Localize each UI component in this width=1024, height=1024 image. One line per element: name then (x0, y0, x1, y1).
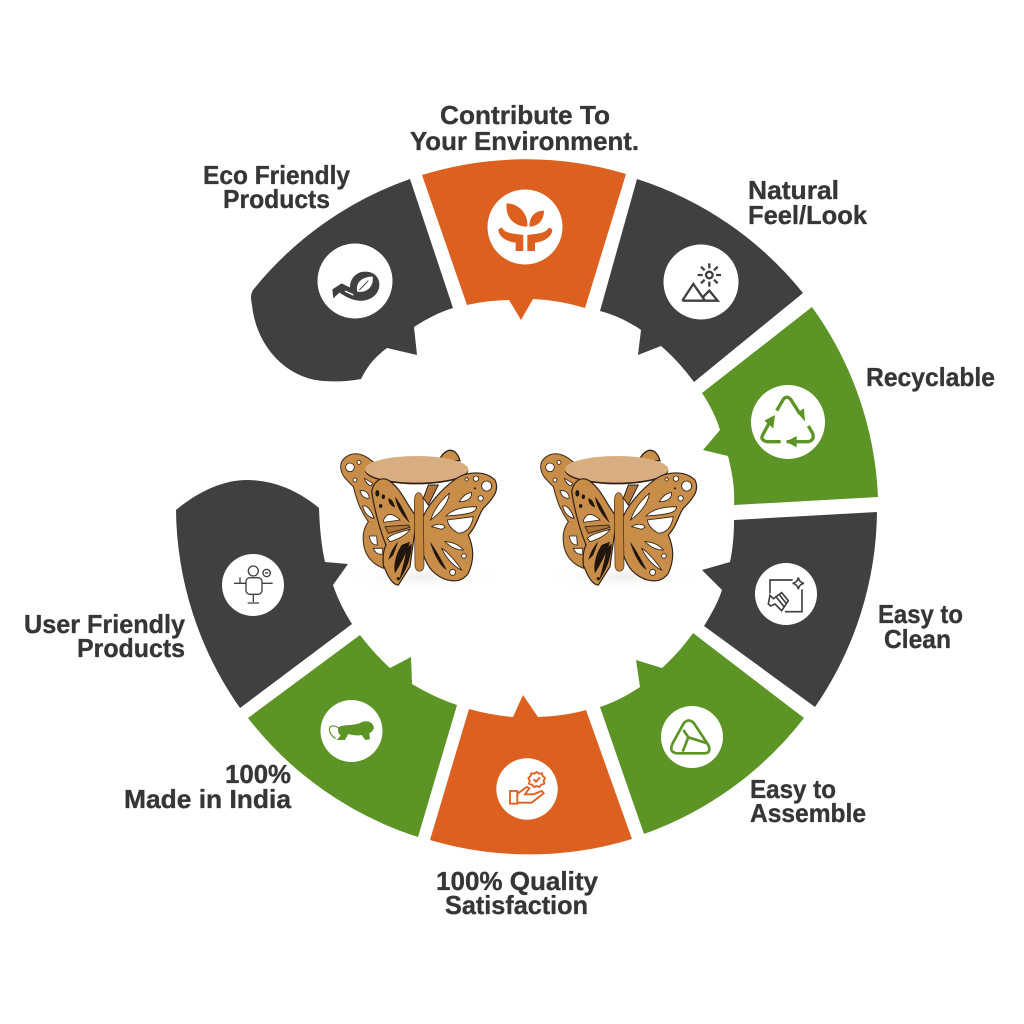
panel: easy to clean (702, 512, 877, 707)
label: 100% made in india: 100% (225, 759, 291, 789)
panel: user friendly products (176, 480, 352, 708)
label: eco friendly products: Products (223, 184, 330, 214)
icon: hands with plant (488, 190, 562, 264)
icon: person at desk (222, 554, 284, 616)
segment shape (702, 512, 877, 707)
label: 100% quality satisfaction: 100% Quality (436, 866, 599, 896)
label: recyclable: Recyclable (866, 362, 995, 392)
panel: easy to assemble (600, 633, 804, 834)
panel: natural feel and look (600, 179, 803, 382)
label: user friendly products: User Friendly (24, 609, 186, 639)
panel: quality satisfaction (430, 695, 632, 854)
label: user friendly products: Products (77, 633, 185, 663)
label: contribute to your environment: Contribute To (440, 100, 610, 130)
label: natural feel/look: Natural (748, 175, 839, 205)
icon: lion (320, 700, 382, 762)
segment shape (702, 307, 878, 505)
label: easy to clean: Easy to (878, 599, 963, 629)
icon: hand wiping surface (755, 563, 817, 625)
label: natural feel/look: Feel/Look (748, 200, 868, 230)
panel: contribute to environment (422, 159, 626, 320)
panel: recyclable (702, 307, 878, 505)
segment shape (430, 695, 632, 854)
label: 100% made in india (124, 759, 292, 814)
label: user friendly products (24, 609, 186, 663)
butterfly table, right (541, 450, 703, 592)
segment shape (248, 635, 457, 837)
segment shape (600, 633, 804, 834)
label: contribute to your environment: Your Environment. (410, 126, 639, 156)
panel: made in india (248, 635, 457, 837)
icon: recycle arrows (751, 385, 825, 459)
segment shape (251, 179, 453, 381)
segment shape (600, 179, 803, 382)
icon: hand with quality badge (496, 758, 558, 820)
label: 100% made in india: Made in India (124, 784, 292, 814)
label: easy to clean: Clean (884, 624, 951, 654)
label: 100% quality satisfaction: Satisfaction (445, 890, 588, 920)
butterfly table, left (341, 450, 503, 592)
icon: hand holding leaf (318, 244, 392, 318)
label: 100% quality satisfaction (436, 866, 599, 920)
segment shape (176, 480, 352, 708)
label: natural feel/look (748, 175, 868, 230)
segment shape (422, 159, 626, 320)
label: eco friendly products (203, 160, 351, 214)
icon: sun and mountains (664, 244, 738, 320)
label: easy to clean (878, 599, 963, 654)
label: eco friendly products: Eco Friendly (203, 160, 351, 190)
label: easy to assemble: Easy to (750, 774, 836, 804)
icon: assembly triangle (661, 706, 723, 768)
label: easy to assemble: Assemble (750, 798, 866, 828)
label: easy to assemble (750, 774, 866, 828)
label: contribute to your environment (410, 100, 639, 156)
panel: eco friendly products (251, 179, 453, 381)
